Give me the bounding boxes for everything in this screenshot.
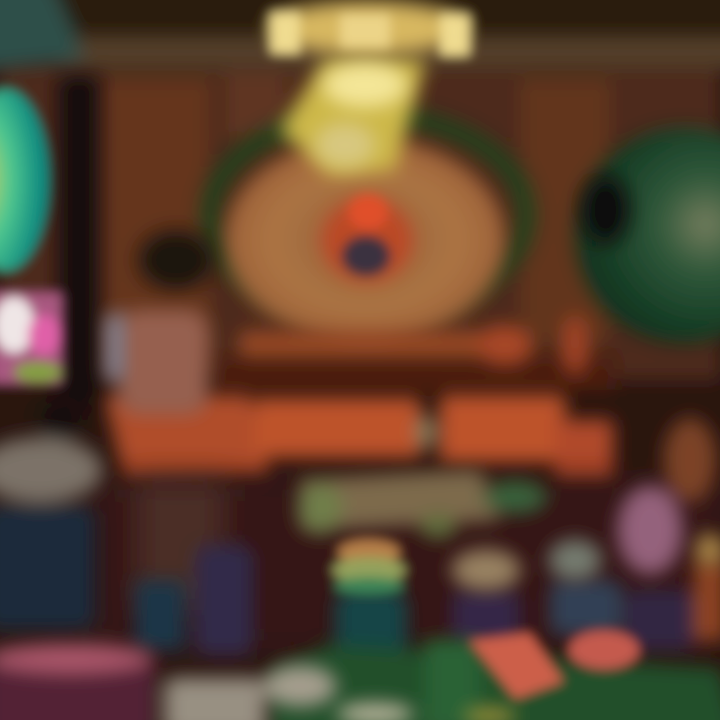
green ring behind golden medallion	[210, 115, 526, 315]
black blob	[582, 176, 630, 244]
seated figures	[135, 545, 720, 685]
dark rail under medallion	[215, 358, 615, 390]
head	[138, 230, 214, 290]
rainbow head of centre figure	[331, 539, 407, 595]
pink chips	[468, 630, 640, 700]
green globe at right	[576, 127, 720, 343]
foreground chip stacks	[0, 644, 516, 720]
legs	[135, 480, 225, 610]
ceiling beams	[0, 0, 720, 70]
green table felt	[270, 645, 720, 720]
torso	[118, 310, 208, 415]
dark emblem centre	[342, 236, 390, 276]
person standing at left	[105, 230, 225, 610]
red emblem	[321, 198, 413, 282]
icon: glowing roulette wheel screen	[0, 88, 50, 272]
dark column at left	[58, 75, 100, 405]
left foreground person	[0, 400, 102, 630]
orange seat row	[105, 395, 613, 482]
pale table centre	[298, 470, 547, 538]
golden medallion	[225, 138, 505, 342]
orange accents above rail	[240, 315, 589, 375]
colourful slot screen	[0, 292, 62, 384]
other seated heads	[452, 418, 720, 590]
chandelier	[268, 2, 470, 175]
dark lower floor	[90, 480, 720, 650]
